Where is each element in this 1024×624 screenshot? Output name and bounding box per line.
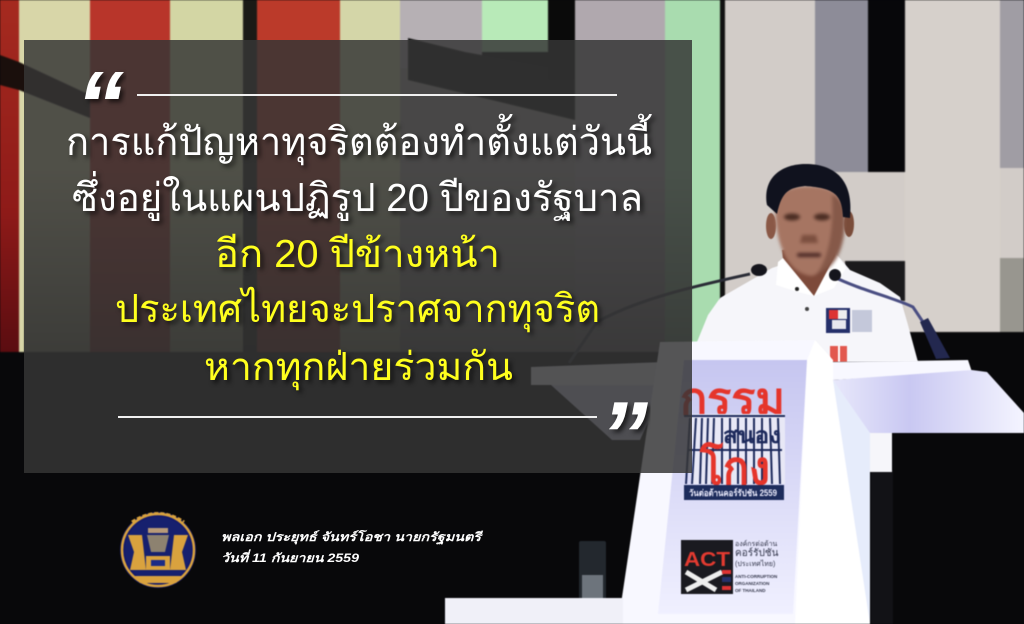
bottom rule	[118, 416, 597, 418]
caption	[221, 529, 484, 565]
campaign logo: สนอง	[723, 423, 781, 448]
podium	[445, 340, 1024, 624]
hair	[766, 164, 851, 218]
neck	[782, 245, 836, 296]
campaign logo	[680, 375, 785, 500]
yellow line 4: ประเทศไทยจะปราศจากทุจริต	[115, 287, 600, 333]
column	[833, 380, 870, 624]
campaign logo: โกง	[699, 441, 770, 494]
ACT logo: OF THAILAND	[735, 588, 766, 593]
left shelf	[531, 362, 665, 385]
right shelf	[833, 360, 972, 380]
white line 2: ซึ่งอยู่ในแผนปฏิรูป 20 ปีของรัฐบาล	[72, 171, 643, 221]
ears	[766, 213, 776, 239]
quote text	[66, 113, 653, 391]
government seal	[120, 512, 196, 588]
ACT logo: (ประเทศไทย)	[735, 559, 775, 568]
ACT logo: ORGANIZATION	[735, 581, 769, 586]
ACT logo: ANTI-CORRUPTION	[735, 574, 777, 579]
cage graphic	[692, 414, 785, 484]
campaign logo: วันต่อต้านคอร์รัปชัน 2559	[689, 487, 777, 498]
shirt	[697, 256, 918, 362]
yellow line 3: อีก 20 ปีข้างหน้า	[215, 233, 500, 276]
collar	[776, 258, 814, 296]
face	[775, 186, 845, 276]
yellow line 5: หากทุกฝ่ายร่วมกัน	[204, 346, 513, 391]
campaign title: กรรม	[680, 375, 785, 424]
trousers	[871, 470, 893, 624]
white line 1: การแก้ปัญหาทุจริตต้องทำตั้งแต่วันนี้	[66, 113, 653, 166]
opening quote mark: “	[76, 52, 124, 159]
microphones	[569, 274, 750, 363]
name and title: พลเอก ประยุทธ์ จันทร์โอชา นายกรัฐมนตรี	[221, 529, 484, 545]
shirt logo	[826, 308, 850, 333]
ACT logo: ACT	[684, 549, 730, 571]
translucent quote panel	[24, 40, 692, 473]
top rule	[137, 94, 617, 96]
ACT logo: คอร์รัปชัน	[735, 547, 779, 559]
ACT logo	[681, 540, 779, 594]
closing quote mark: ”	[600, 382, 648, 489]
white table edge	[445, 598, 623, 624]
ACT logo: องค์กรต่อต้าน	[735, 540, 778, 548]
speaker	[569, 164, 950, 624]
drinking glass	[579, 541, 606, 601]
front panel	[658, 360, 807, 614]
date: วันที่ 11 กันยายน 2559	[221, 549, 359, 565]
